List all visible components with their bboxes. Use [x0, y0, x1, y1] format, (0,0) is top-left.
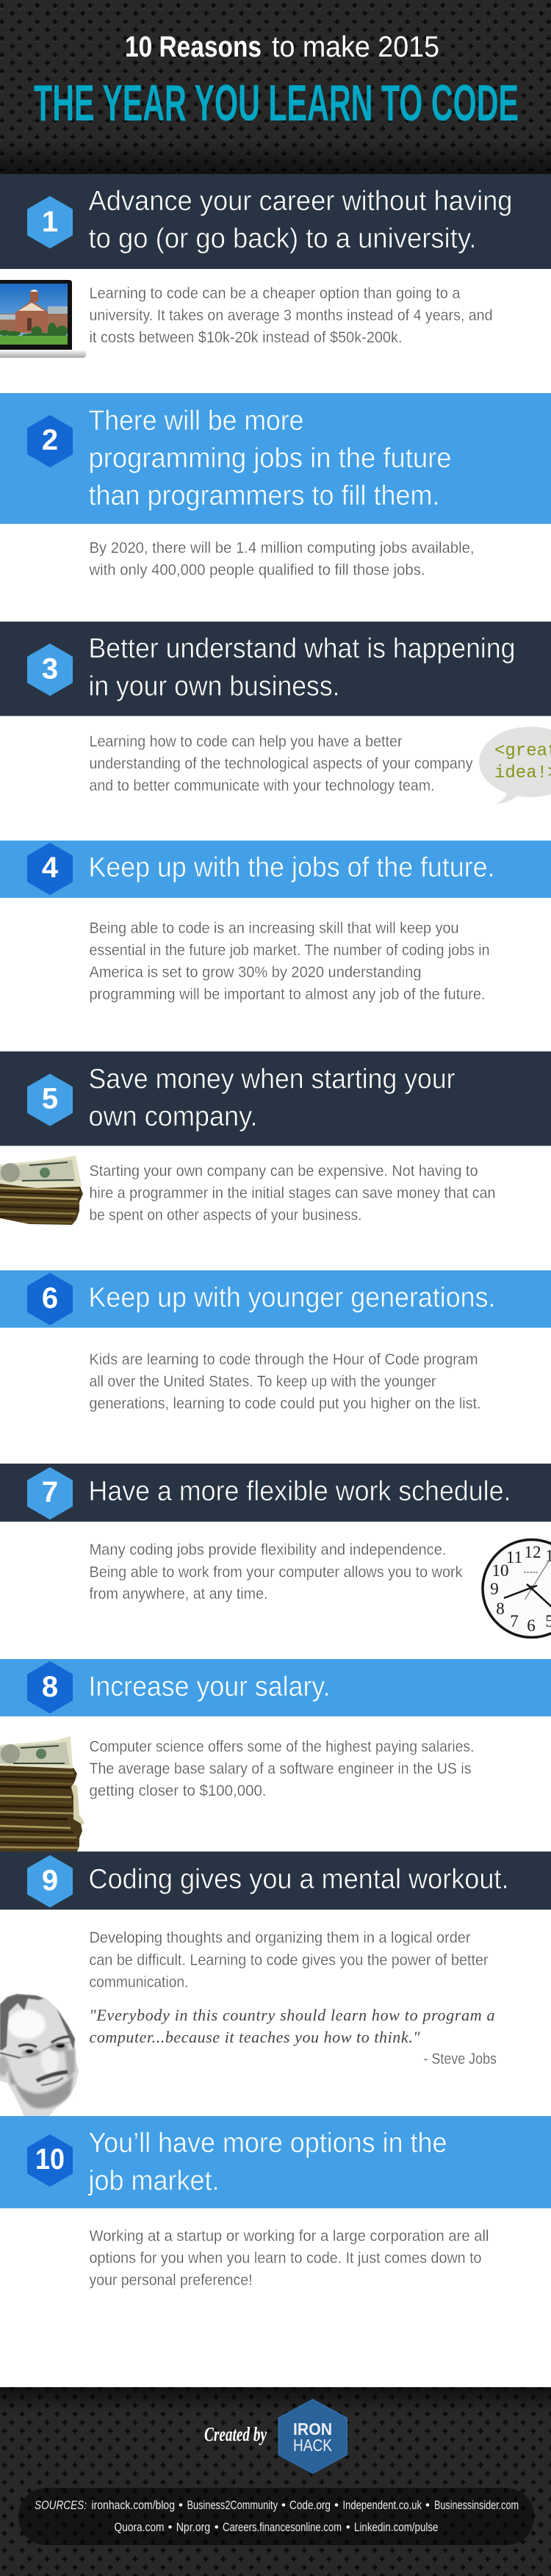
- panel: reason 2: [0, 393, 551, 579]
- sources pill: Npr.org: [176, 2520, 210, 2534]
- body text 1: university. It takes on average 3 months instead of 4 years, and: [90, 307, 492, 324]
- image: wall clock: 6: [527, 1616, 536, 1635]
- body text 5: Starting your own company can be expensive. Not having to: [90, 1162, 478, 1180]
- heading 5: Save money when starting your: [88, 1064, 455, 1095]
- banner 10: [0, 2116, 551, 2209]
- icon: hexagon number 1: 1: [42, 206, 58, 238]
- body text 8: The average base salary of a software engineer in the US is: [90, 1760, 472, 1777]
- body text 3: and to better communicate with your technology team.: [90, 777, 435, 794]
- body text 3: understanding of the technological aspects of your company: [90, 755, 473, 772]
- subtitle: 10 Reasons to make 2015: 10 Reasons: [125, 31, 262, 63]
- heading 2: than programmers to fill them.: [88, 481, 439, 511]
- sources pill: •: [215, 2520, 219, 2534]
- quote: Steve Jobs: - Steve Jobs: [423, 2051, 497, 2068]
- body text 1: [90, 285, 492, 346]
- heading 6: Keep up with younger generations.: [88, 1283, 495, 1314]
- image: wall clock: [483, 1540, 551, 1637]
- body text 5: be spent on other aspects of your business.: [90, 1206, 361, 1224]
- body text 7: from anywhere, at any time.: [90, 1586, 267, 1602]
- banner 7: [0, 1464, 551, 1522]
- image: wall clock: 9: [490, 1580, 499, 1598]
- heading 1: to go (or go back) to a university.: [88, 223, 476, 254]
- banner 8: [0, 1659, 551, 1716]
- icon: hexagon number 7: 7: [42, 1476, 58, 1508]
- body text 5: [90, 1162, 495, 1224]
- banner 1: [0, 174, 551, 269]
- banner 5: [0, 1051, 551, 1146]
- image: wall clock: 8: [496, 1600, 505, 1618]
- body text 10: your personal preference!: [90, 2272, 253, 2289]
- icon: hexagon number 8: 8: [42, 1671, 58, 1703]
- body text 6: all over the United States. To keep up with the younger: [90, 1373, 436, 1390]
- banner 9: [0, 1852, 551, 1910]
- image: wall clock: 10: [492, 1561, 508, 1580]
- image: stack of money: [0, 1155, 83, 1225]
- body text 9: Developing thoughts and organizing them in a logical order: [90, 1929, 470, 1946]
- heading 4: Keep up with the jobs of the future.: [88, 852, 495, 883]
- banner 4: [0, 841, 551, 898]
- heading 7: Have a more flexible work schedule.: [88, 1476, 511, 1507]
- body text 1: it costs between $10k-20k instead of $50k-200k.: [90, 329, 403, 346]
- body text 3: Learning how to code can help you have a better: [90, 733, 403, 750]
- panel: reason 4: [0, 841, 551, 1003]
- body text 8: getting closer to $100,000.: [90, 1782, 266, 1799]
- sources pill: Businessinsider.com: [434, 2498, 519, 2512]
- body text 2: [89, 539, 475, 579]
- panel: reason 7: [0, 1464, 551, 1637]
- body text 2: with only 400,000 people qualified to fill those jobs.: [89, 561, 425, 579]
- panel: reason 6: [0, 1270, 551, 1412]
- heading 3: in your own business.: [88, 672, 339, 702]
- panel: reason 8: [0, 1659, 551, 1852]
- icon: hexagon number 7: [28, 1468, 72, 1518]
- icon: hexagon number 3: 3: [42, 652, 58, 685]
- image: wall clock: 7: [510, 1612, 519, 1630]
- icon: hexagon number 6: [28, 1274, 72, 1324]
- icon: hexagon number 5: 5: [42, 1083, 58, 1115]
- icon: hexagon number 10: 10: [35, 2143, 65, 2176]
- heading 1: [88, 186, 513, 254]
- image: portrait of Steve Jobs: [0, 1994, 79, 2116]
- heading 8: Increase your salary.: [88, 1672, 331, 1702]
- heading 2: [88, 406, 451, 511]
- body text 6: Kids are learning to code through the Hour of Code program: [90, 1351, 478, 1368]
- body text 4: [90, 920, 489, 1003]
- icon: hexagon number 10: [28, 2135, 72, 2185]
- body text 1: Learning to code can be a cheaper option than going to a: [90, 285, 461, 302]
- body text 8: [90, 1738, 475, 1799]
- heading 10: You’ll have more options in the: [88, 2128, 447, 2159]
- icon: hexagon number 5: [28, 1075, 72, 1125]
- sources pill: •: [425, 2498, 430, 2512]
- banner 3: [0, 622, 551, 716]
- icon: hexagon number 1: [28, 197, 72, 247]
- panel: reason 1: [0, 174, 551, 358]
- heading 10: job market.: [88, 2166, 219, 2197]
- body text 7: Being able to work from your computer allows you to work: [90, 1564, 463, 1581]
- panel: reason 5: [0, 1051, 551, 1225]
- logo: Iron Hack hexagon: IRON: [293, 2420, 332, 2439]
- footer panel: [0, 2387, 551, 2576]
- panel: reason 3: [0, 622, 551, 804]
- icon: hexagon number 9: [28, 1856, 72, 1906]
- heading 5: [88, 1064, 455, 1132]
- header panel: [0, 0, 551, 174]
- text: created by: Created by: [204, 2423, 267, 2445]
- icon: hexagon number 2: [28, 416, 72, 466]
- icon: hexagon number 4: 4: [42, 852, 59, 884]
- heading 9: Coding gives you a mental workout.: [88, 1864, 508, 1895]
- sources pill: •: [334, 2498, 339, 2512]
- sources pill: •: [179, 2498, 183, 2512]
- icon: hexagon number 4: [28, 843, 72, 893]
- image: wall clock: 11: [506, 1548, 522, 1566]
- body text 10: options for you when you learn to code. It just comes down to: [90, 2250, 482, 2267]
- body text 7: [90, 1541, 463, 1602]
- heading 2: programming jobs in the future: [88, 443, 451, 474]
- icon: hexagon number 6: 6: [42, 1282, 58, 1314]
- body text 4: Being able to code is an increasing skill that will keep you: [90, 920, 458, 937]
- heading 10: [88, 2128, 447, 2197]
- body text 4: essential in the future job market. The number of coding jobs in: [90, 942, 489, 959]
- image: wall clock: 12: [525, 1543, 541, 1561]
- logo: Iron Hack hexagon: HACK: [293, 2436, 332, 2455]
- body text 7: Many coding jobs provide flexibility and independence.: [90, 1541, 447, 1558]
- banner 6: [0, 1270, 551, 1328]
- body text 8: Computer science offers some of the highest paying salaries.: [90, 1738, 475, 1755]
- sources pill: Careers.financesonline.com: [223, 2520, 342, 2534]
- body text 6: [90, 1351, 480, 1412]
- body text 6: generations, learning to code could put you higher on the list.: [90, 1395, 480, 1412]
- body text 9: [90, 1929, 489, 1991]
- body text 10: Working at a startup or working for a large corporation are all: [90, 2228, 489, 2245]
- heading 2: There will be more: [88, 406, 304, 436]
- heading 3: [88, 633, 516, 702]
- sources pill: Independent.co.uk: [342, 2498, 422, 2512]
- icon: hexagon number 8: [28, 1662, 72, 1712]
- sources pill: •: [168, 2520, 173, 2534]
- sources pill: Linkedin.com/pulse: [354, 2520, 438, 2534]
- body text 5: hire a programmer in the initial stages can save money that can: [90, 1184, 495, 1202]
- sources pill: Quora.com: [115, 2520, 165, 2534]
- image: tall stack of money: [0, 1736, 84, 1852]
- heading 1: Advance your career without having: [88, 186, 513, 217]
- body text 2: By 2020, there will be 1.4 million computing jobs available,: [90, 539, 475, 557]
- body text 9: can be difficult. Learning to code gives you the power of better: [90, 1951, 489, 1969]
- body text 10: [90, 2228, 489, 2289]
- sources pill: Code.org: [289, 2498, 331, 2512]
- heading 3: Better understand what is happening: [88, 633, 516, 664]
- sources pill: Business2Community: [187, 2498, 278, 2512]
- image: laptop showing a university: [0, 280, 86, 358]
- body text 4: programming will be important to almost any job of the future.: [90, 986, 485, 1003]
- body text 3: [90, 733, 473, 794]
- subtitle: 10 Reasons to make 2015: to make 2015: [272, 31, 439, 63]
- quote: Steve Jobs: computer...because it teaches you how to think.": [90, 2028, 420, 2046]
- sources pill: ironhack.com/blog: [91, 2498, 175, 2512]
- heading 5: own company.: [88, 1101, 257, 1132]
- callout: great idea speech bubble: [479, 727, 551, 804]
- icon: hexagon number 9: 9: [42, 1865, 58, 1897]
- sources pill: •: [346, 2520, 350, 2534]
- panel: reason 10: [0, 2116, 551, 2289]
- icon: hexagon number 3: [28, 645, 72, 695]
- sources pill: SOURCES:: [35, 2498, 87, 2512]
- logo: Iron Hack hexagon: [279, 2400, 347, 2473]
- quote: Steve Jobs: "Everybody in this country should learn how to program a: [90, 2006, 495, 2024]
- icon: hexagon number 2: 2: [42, 424, 58, 456]
- sources pill: •: [281, 2498, 286, 2512]
- subtitle: 10 Reasons to make 2015: [125, 31, 439, 63]
- sources pill: [18, 2488, 534, 2545]
- body text 4: America is set to grow 30% by 2020 understanding: [90, 964, 422, 981]
- quote: Steve Jobs: [90, 2006, 497, 2068]
- panel: reason 9: [0, 1852, 551, 2116]
- body text 9: communication.: [90, 1974, 188, 1991]
- banner 2: [0, 393, 551, 524]
